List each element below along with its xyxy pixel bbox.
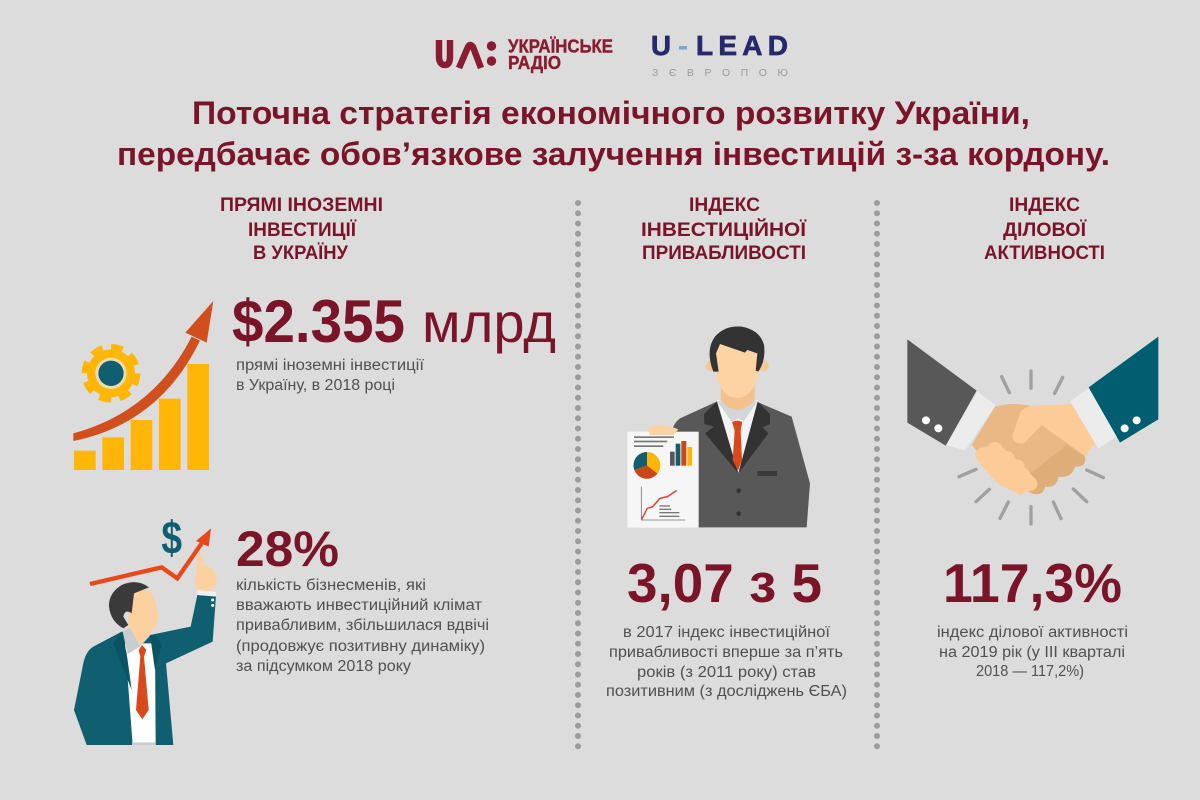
heading: business activity index: ДІЛОВОЇ [1003,220,1087,241]
stat: 117.3 percent: 117,3% [943,552,1122,614]
text: businessmen note: (продовжує позитивну динаміку) [236,638,485,655]
text: businessmen note: привабливим, збільшилася вдвічі [236,617,489,634]
stat: 2.355 billion: $2.355 [232,288,405,355]
text: businessmen note: кількість бізнесменів, які [236,577,426,594]
heading: investment attractiveness index: ІНВЕСТИЦІЙНОЇ [641,219,807,241]
text: business activity note: на 2019 рік (у III кварталі [939,644,1125,661]
heading: foreign direct investment [220,195,383,264]
logo: U-LEAD [651,30,788,79]
stat: 28 percent: 28% [236,521,339,577]
icon: growth chart with gear [73,301,213,470]
heading: foreign direct investment: ІНВЕСТИЦІЇ [248,220,357,241]
text: businessmen note [236,577,489,675]
icon: businessman pointing at rising arrow [74,511,217,745]
text: investment attractiveness note [606,624,847,700]
heading: business activity index [984,195,1105,264]
heading: investment attractiveness index: ІНДЕКС [689,195,760,216]
logo: U-LEAD: U [651,30,671,61]
text: investment attractiveness note: привабливості вперше за п’ять [609,644,843,661]
text: investment attractiveness note: в 2017 індекс інвестиційної [623,624,831,641]
logo: Ukrainian Radio: РАДІО [508,53,561,73]
logo: U-LEAD: LEAD [696,30,788,61]
text: investment attractiveness note: позитивним (з досліджень ЄБА) [606,683,847,700]
text: foreign investment note: в Україну, в 2018 році [236,377,395,394]
text: business activity note: індекс ділової активності [937,624,1128,641]
stat: 3.07 of 5: 3,07 з 5 [627,552,822,614]
text: foreign investment note [236,357,425,394]
text: foreign investment note: прямі іноземні інвестиції [236,357,425,374]
heading: business activity index: ІНДЕКС [1009,195,1080,216]
heading: investment attractiveness index: ПРИВАБЛИВОСТІ [642,243,806,264]
heading: investment attractiveness index [641,195,807,264]
heading: foreign direct investment: В УКРАЇНУ [253,243,348,264]
text: investment attractiveness note: років (з 2011 року) став [637,664,816,681]
stat: 2.355 billion [232,288,556,355]
logo: Ukrainian Radio: УКРАЇНСЬКЕ [508,36,613,56]
logo: Ukrainian Radio [439,36,613,73]
stat: 2.355 billion: млрд [422,291,556,354]
title: передбачає обов’язкове залучення інвестицій з-за кордону. [117,136,1110,172]
logo: U-LEAD: З Є В Р О П О Ю [652,67,788,79]
text: businessmen note: вважають инвестиційний клімат [236,597,482,614]
heading: foreign direct investment: ПРЯМІ ІНОЗЕМНІ [220,195,383,216]
heading: business activity index: АКТИВНОСТІ [984,243,1105,264]
icon: handshake [907,337,1158,524]
title [117,95,1110,172]
text: business activity note: 2018 — 117,2%) [976,663,1084,680]
title: Поточна стратегія економічного розвитку України, [192,95,1030,131]
text: businessmen note: за підсумком 2018 року [236,658,411,675]
icon: businessman with report [627,326,810,528]
icon: businessman pointing at rising arrow: $ [161,511,182,563]
text: business activity note [937,624,1128,680]
